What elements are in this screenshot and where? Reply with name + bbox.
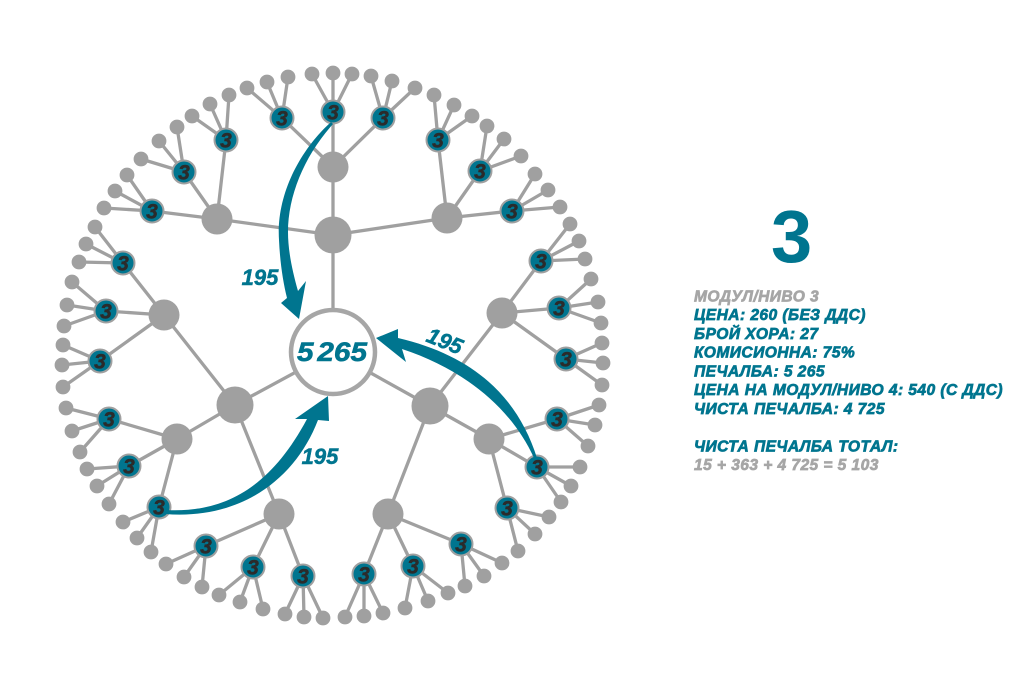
branch: lower right: 3 <box>551 408 563 432</box>
branch: bottom left: 3 <box>200 536 212 558</box>
branch: top: 3 <box>276 108 288 130</box>
main hub: lower left <box>216 386 254 424</box>
branch: bottom right: 3 <box>358 564 370 586</box>
branch: left: 3 <box>94 350 106 374</box>
branch: upper left: 3 <box>178 162 190 184</box>
net profit line: ЧИСТА ПЕЧАЛБА: 4 725 <box>694 401 885 418</box>
connectors from centre to main hubs <box>164 167 502 514</box>
branch: upper left: 3 <box>146 200 158 224</box>
branch: upper right <box>426 88 567 233</box>
branch: lower right: 3 <box>501 498 513 520</box>
arrow: top node to centre <box>279 122 333 319</box>
total formula: 15 + 363 + 4 725 = 5 103 <box>694 457 879 474</box>
branch: bottom left: 3 <box>247 556 259 580</box>
branch: left: 3 <box>117 252 129 276</box>
branch: bottom left <box>159 498 330 625</box>
branch: right: 3 <box>553 298 565 320</box>
main hub: top <box>314 216 352 254</box>
arrow: lower-right node to centre <box>376 329 537 458</box>
branch: upper right: 3 <box>506 200 518 224</box>
profit line: ПЕЧАЛБА: 5 265 <box>694 364 825 380</box>
large level number: 3 <box>771 195 812 278</box>
branch: lower left: 3 <box>103 408 115 432</box>
radial tree diagram <box>55 66 610 625</box>
value label: top arrow: 195 <box>242 265 279 290</box>
branch: right: 3 <box>535 250 547 274</box>
details text block <box>694 288 1003 474</box>
branch: bottom left: 3 <box>297 566 309 588</box>
branch: bottom right <box>338 498 509 624</box>
branch: lower right <box>474 398 606 558</box>
total heading: ЧИСТА ПЕЧАЛБА ТОТАЛ: <box>694 438 898 456</box>
branch: upper left: 3 <box>220 130 232 152</box>
branch: top: 3 <box>327 102 339 124</box>
branch: right: 3 <box>560 348 572 372</box>
value label: lower-right arrow: 195 <box>423 323 467 360</box>
branch: bottom right: 3 <box>455 534 467 556</box>
next level price line: ЦЕНА НА МОДУЛ/НИВО 4: 540 (С ДДС) <box>694 382 1003 399</box>
branch: lower left <box>59 401 192 559</box>
people line: БРОЙ ХОРА: 27 <box>694 323 819 343</box>
main hub: lower right <box>412 388 448 424</box>
branch: lower left: 3 <box>123 456 135 478</box>
branch: lower right: 3 <box>531 456 543 480</box>
commission line: КОМИСИОННА: 75% <box>694 344 855 362</box>
branch: upper right: 3 <box>474 160 486 184</box>
heading line: МОДУЛ/НИВО 3 <box>694 288 819 306</box>
branch: top <box>240 66 422 182</box>
arrow: lower-left node to centre <box>165 396 329 515</box>
branch: top: 3 <box>377 108 389 130</box>
branch: right <box>486 217 610 392</box>
centre circle with total <box>291 310 375 394</box>
centre circle with total: 5 265 <box>297 337 368 367</box>
branch: upper right: 3 <box>432 130 444 152</box>
value label: lower-left arrow: 195 <box>302 444 339 469</box>
price line: ЦЕНА: 260 (БЕЗ ДДС) <box>694 307 866 324</box>
branch: upper left <box>97 88 237 234</box>
branch: bottom right: 3 <box>407 556 419 578</box>
branch: left <box>55 220 180 394</box>
branch: lower left: 3 <box>153 496 165 520</box>
branch: left: 3 <box>100 300 112 324</box>
